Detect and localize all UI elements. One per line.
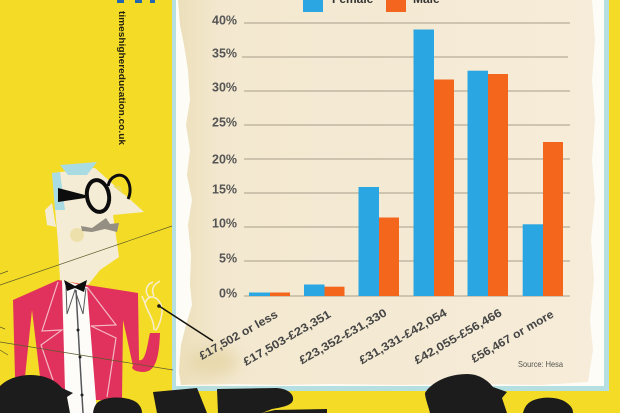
- y axis labels: 25%: [212, 116, 237, 130]
- y axis labels: 30%: [212, 80, 237, 94]
- shirt: [62, 280, 97, 413]
- pointer: [159, 306, 213, 341]
- hand: [142, 281, 162, 330]
- category labels: £31,331-£42,054: [358, 307, 450, 367]
- y axis labels: 15%: [212, 182, 237, 196]
- silhouette: shape two: [217, 388, 293, 413]
- illustration: man pointing: [13, 162, 213, 413]
- bow tie: [64, 280, 87, 292]
- silhouette: shape three: [262, 409, 327, 413]
- legend swatch: male: [386, 0, 406, 12]
- jacket: [13, 280, 160, 400]
- hair: [60, 162, 97, 175]
- category labels: £17,502 or less: [198, 309, 280, 363]
- silhouette: left head: [0, 375, 73, 413]
- y axis labels: 20%: [212, 152, 237, 166]
- silhouette: right small head: [523, 398, 573, 413]
- cheek: [70, 228, 84, 242]
- source note: Source: Hesa: [518, 359, 563, 369]
- female bars: [249, 30, 543, 296]
- category labels: £23,352-£31,330: [298, 307, 389, 367]
- panel: chart paper: [172, 0, 609, 391]
- glasses: [58, 175, 130, 214]
- silhouette heads and letters: [0, 374, 573, 413]
- y axis labels: 35%: [212, 46, 237, 60]
- legend swatch: female: [303, 0, 323, 12]
- silhouette: small head: [93, 398, 142, 413]
- y axis labels: 10%: [212, 216, 237, 230]
- silhouette: right head: [425, 374, 507, 413]
- category labels: £56,467 or more: [470, 309, 556, 366]
- face: [52, 168, 144, 285]
- y axis labels: 40%: [212, 14, 237, 28]
- male bars: [270, 74, 563, 296]
- logo fragment: [117, 0, 155, 3]
- legend: [303, 0, 440, 12]
- y axis labels: 5%: [219, 252, 237, 266]
- lapels: [41, 282, 116, 397]
- grid lines: [242, 23, 570, 296]
- bar chart: [198, 14, 570, 369]
- ear: [45, 203, 56, 227]
- silhouette: shape one: [153, 388, 207, 413]
- moustache: [81, 218, 119, 232]
- thin crossing lines: [0, 226, 173, 370]
- y axis labels: [212, 14, 237, 300]
- category labels: £17,503-£23,351: [242, 308, 334, 369]
- category labels: £42,055-£56,466: [412, 307, 504, 367]
- y axis labels: 0%: [219, 286, 237, 300]
- shirt placket and buttons: [66, 286, 86, 413]
- category labels: [198, 307, 556, 369]
- paper mottling, bottom left: [186, 346, 238, 378]
- website address: timeshighereducation.co.uk: [116, 11, 127, 146]
